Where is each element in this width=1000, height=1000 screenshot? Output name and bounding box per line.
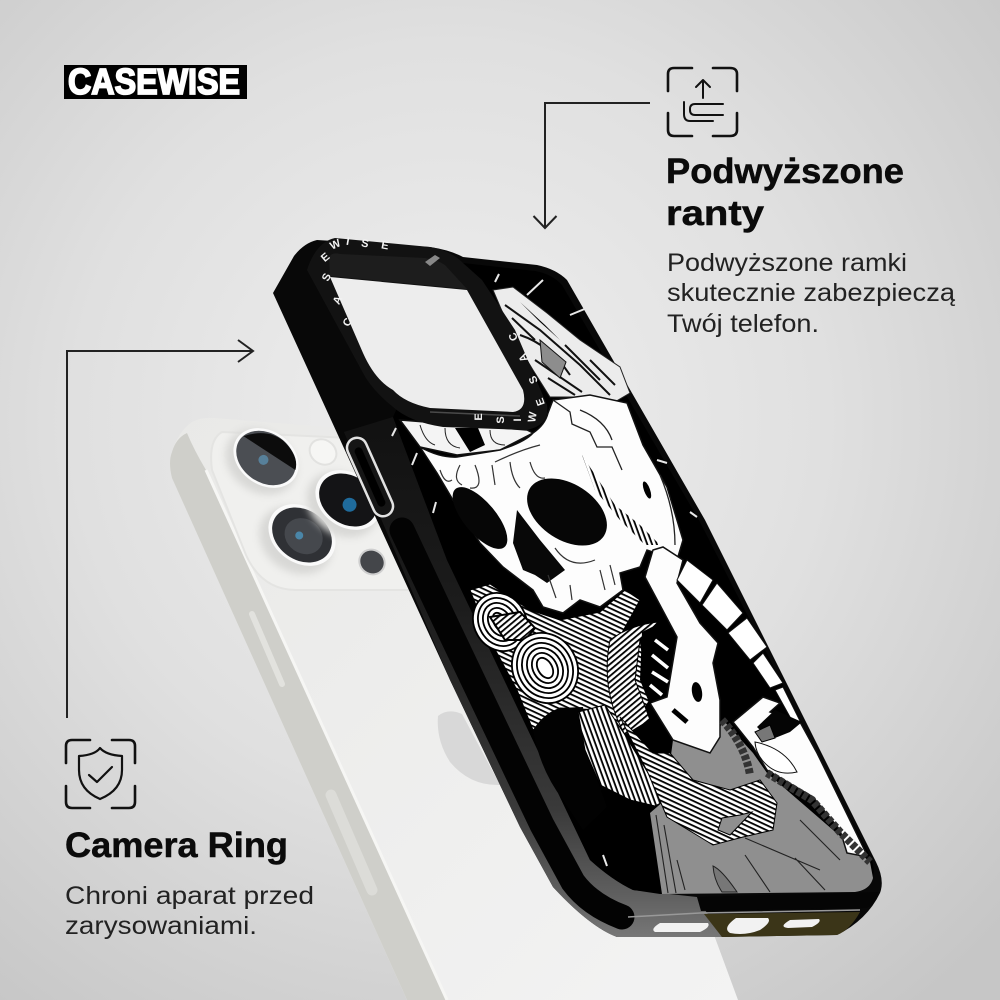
horn curl: [607, 622, 658, 735]
bottom ports: [653, 918, 820, 934]
ring lettering: [319, 236, 548, 424]
ring lettering: W: [328, 237, 343, 253]
skull: [420, 395, 683, 613]
side frame band: [344, 417, 722, 937]
swirl black drips: [490, 612, 535, 640]
horse mouth: [640, 625, 664, 705]
heading: camera ring: Camera Ring: [65, 826, 288, 865]
swirl centre: [499, 621, 591, 715]
text: camera ring description: zarysowaniami.: [65, 912, 257, 940]
bone block 4: [753, 653, 783, 688]
teeth lobes: [400, 420, 533, 455]
case body: [273, 240, 882, 937]
lens: right: [294, 455, 393, 551]
eye socket right: [515, 465, 619, 559]
radiating ticks: [392, 274, 697, 866]
case artwork: [392, 263, 874, 894]
bottom black band: [697, 892, 878, 911]
ring lettering: A: [331, 294, 345, 307]
skull brow lines: [440, 445, 545, 488]
apple logo shadow: [438, 711, 500, 785]
camera ring: [307, 236, 548, 430]
arrow: to raised edges: [534, 103, 650, 228]
bone strip: [775, 687, 812, 745]
heading: raised edges: [666, 152, 904, 233]
ring lettering: E: [473, 413, 485, 421]
ring lettering: S: [320, 272, 334, 283]
text: raised edges description: Twój telefon.: [667, 310, 819, 338]
ring wall highlight: [425, 255, 440, 266]
horse skull: [645, 547, 720, 753]
swirl small left: [462, 583, 538, 661]
grey cloak: [650, 720, 873, 894]
eye socket left: [443, 479, 517, 557]
text: raised edges description: skutecznie zabezpieczą: [667, 279, 955, 307]
horse nostril: [673, 710, 687, 722]
logo: CASEWISE: CASEWISE: [68, 61, 240, 102]
ring inner wall: [329, 253, 467, 289]
cheek lines: [548, 548, 615, 600]
ring opening: [330, 277, 524, 412]
ring body: [307, 238, 547, 430]
mane fringe: [718, 812, 752, 835]
lower right skull: [733, 697, 868, 857]
ring lettering: C: [341, 316, 355, 329]
hatching beside eye: [582, 455, 660, 545]
rope band: [722, 720, 870, 862]
swirl masses: [470, 584, 650, 735]
crown black gap: [520, 302, 560, 340]
side slot: [402, 530, 622, 917]
nose: [513, 510, 565, 583]
ring lettering: E: [380, 239, 389, 253]
lens: top: [213, 413, 311, 508]
lens: bottom: [246, 489, 348, 588]
heading: raised edges: ranty: [666, 194, 765, 233]
volume button: [331, 795, 372, 890]
side highlight line: [206, 470, 447, 1000]
sensor: [354, 545, 390, 579]
black case: [273, 240, 882, 937]
olive strip: [704, 912, 860, 937]
phone side edge: [170, 433, 447, 1000]
cloak lines: [656, 815, 840, 893]
ring lettering: W: [526, 410, 540, 423]
ring lettering: I: [512, 418, 524, 422]
icon: shield: [66, 740, 135, 808]
crown shading: [540, 340, 566, 378]
ring bottom highlight: [430, 412, 520, 416]
skull crack: [553, 400, 675, 545]
volume button: [344, 435, 396, 519]
bone block 3: [728, 618, 767, 660]
icon: raised edges: [668, 68, 737, 136]
ring lettering: S: [360, 237, 369, 251]
camera plateau: [211, 432, 420, 590]
horse eye: [690, 681, 704, 703]
text: raised edges description: Podwyższone ramki: [667, 249, 907, 277]
horse teeth: [650, 640, 668, 695]
ear: [755, 742, 797, 773]
bottom highlight: [628, 910, 860, 917]
flash: [305, 434, 341, 470]
mane: [620, 717, 777, 845]
text: raised edges description: [667, 249, 955, 338]
white phone behind the case: [170, 413, 738, 1000]
lower right mouth: [757, 710, 802, 740]
cloak fold: left: [713, 866, 737, 892]
text: camera ring description: Chroni aparat przed: [65, 882, 314, 910]
ring lettering: C: [507, 330, 521, 343]
arrow: to camera ring: [67, 340, 253, 718]
hair drips: [578, 705, 667, 806]
ring lettering: E: [534, 396, 548, 407]
bone block 2: [702, 583, 743, 630]
ring lettering: S: [495, 416, 507, 424]
teeth gap: [455, 428, 485, 452]
crown: [493, 287, 630, 403]
teeth arcs: [420, 425, 505, 448]
crown detail: [505, 305, 615, 395]
ring lettering: A: [517, 351, 531, 364]
black orb: [533, 707, 607, 830]
heading: raised edges: Podwyższone: [666, 152, 904, 191]
action button: [252, 614, 282, 684]
screen black field: [393, 263, 874, 894]
ring lettering: E: [319, 251, 332, 265]
text: camera ring description: [65, 882, 314, 940]
ring lettering: S: [527, 374, 541, 385]
ring lettering: I: [345, 236, 350, 248]
temple slit: [641, 481, 653, 499]
bone block 1: [677, 560, 713, 603]
lower right teeth shade: [755, 725, 775, 742]
